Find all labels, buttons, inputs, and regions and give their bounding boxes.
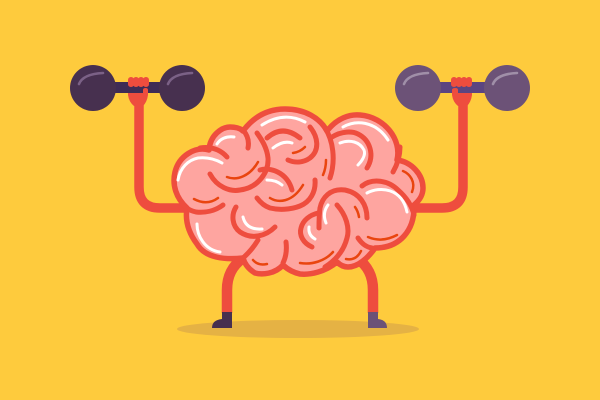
left arm bbox=[139, 95, 190, 208]
thick inner folds bbox=[187, 127, 414, 267]
right fist bbox=[451, 77, 472, 106]
right dumbbell bbox=[395, 65, 530, 111]
right leg bbox=[357, 258, 387, 328]
left fist bbox=[128, 77, 149, 106]
white highlights bbox=[178, 117, 407, 252]
brain bbox=[174, 109, 423, 274]
orange accent folds bbox=[194, 147, 413, 264]
brain outline bbox=[174, 109, 423, 274]
right arm bbox=[412, 95, 463, 208]
ground shadow bbox=[177, 320, 419, 338]
left leg bbox=[212, 258, 243, 328]
left dumbbell bbox=[70, 65, 205, 111]
